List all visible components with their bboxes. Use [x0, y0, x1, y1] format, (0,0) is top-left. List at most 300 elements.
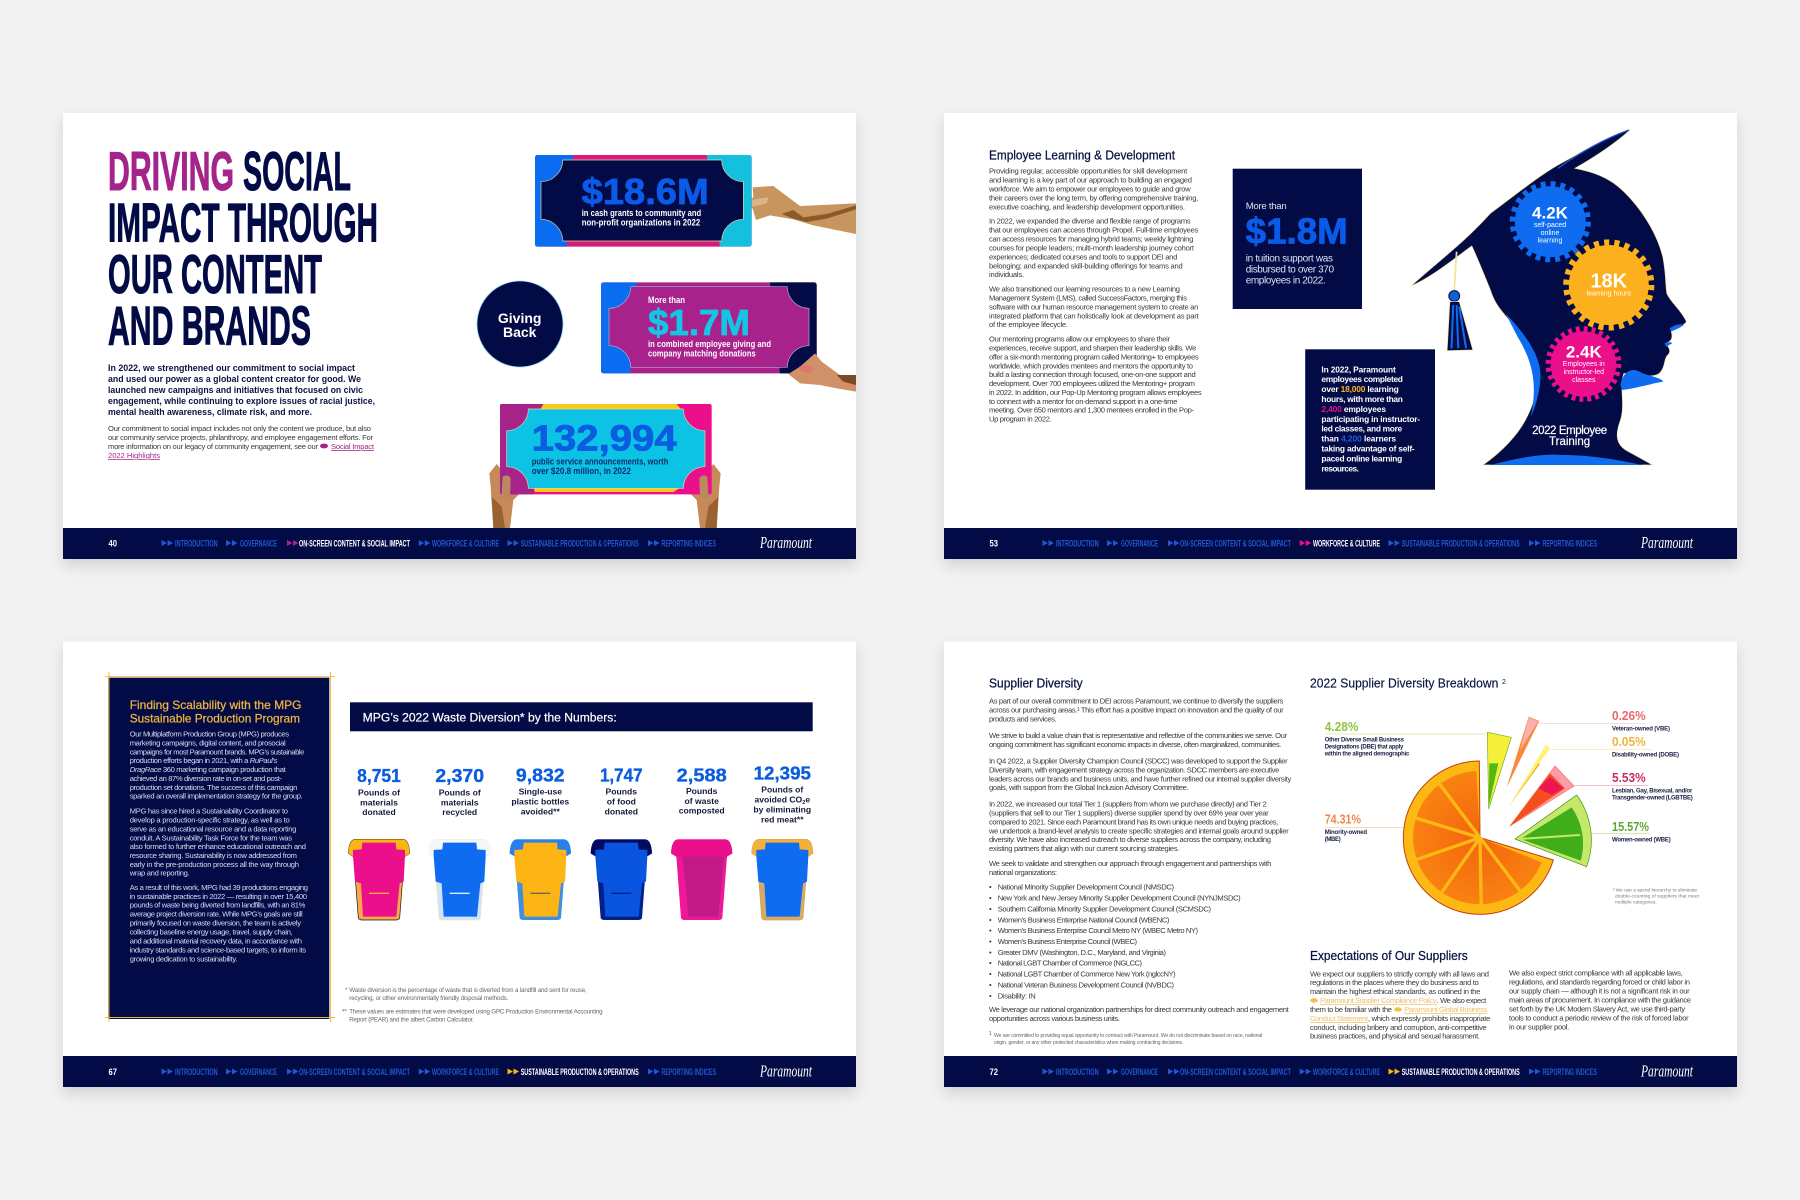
text column: expectations left: . We also expect [1437, 996, 1487, 1005]
body text: supplier diversity [988, 697, 1292, 877]
list: partner organizations: Disability: IN [998, 992, 1036, 1001]
gear: self-paced learning: online [1541, 230, 1559, 237]
hands holding third sign [489, 464, 721, 528]
gear: self-paced learning: 4.2K [1532, 203, 1569, 222]
panel body text: marketing campaigns, digital content, and prosocial [130, 738, 286, 747]
stat: waste composted: Pounds [686, 786, 718, 796]
stat: waste composted [677, 764, 727, 816]
sign: $1.7M: company matching donations [648, 348, 756, 358]
footnotes: waste diversion: ** [342, 1008, 347, 1015]
stat: materials donated: donated [362, 807, 396, 817]
gear: instructor-led classes: classes [1572, 377, 1596, 384]
heading: employee learning: Employee Learning & Development [989, 148, 1175, 162]
footer navigation: page 53: WORKFORCE & CULTURE [1313, 538, 1380, 548]
body text: supplier diversity: leaders across our brands and business units, and have further refined our internal supplier diversity [989, 774, 1292, 783]
list: partner organizations: Southern California Minority Supplier Development Council (SCMSDC) [998, 904, 1211, 913]
stat: materials donated: 8,751 [357, 765, 401, 786]
label: other diverse: Other Diverse Small Business [1325, 738, 1405, 744]
body text: supplier diversity: In 2022, we increased our total Tier 1 (suppliers from whom we purchase directly) and Tier 2 [989, 799, 1267, 808]
secondary paragraph with link [108, 424, 375, 460]
text column: expectations right: main areas of procurement. In compliance with the guidance [1509, 996, 1691, 1005]
stat: avoided CO2e: 2 [802, 800, 805, 806]
footer navigation: page 53: Paramount [1640, 533, 1694, 552]
body text: supplier diversity: diversity. We have also increased outreach to diverse suppliers across the company, including [989, 835, 1271, 844]
callout: training summary: resources. [1321, 463, 1359, 473]
panel heading [130, 698, 301, 725]
closing paragraph and footnote: We are committed to providing equal opportunity to contract with Paramount. We do not discriminate based on race, national [994, 1033, 1262, 1039]
label: veteran-owned: 0.26% [1612, 709, 1646, 723]
page 67: sustainable production [63, 642, 856, 1087]
closing paragraph and footnote: 1 [989, 1031, 992, 1037]
label: LGBTBE: 5.53% [1612, 771, 1646, 785]
text column: expectations right: in our supplier pool. [1509, 1023, 1569, 1032]
text column: expectations left: Paramount Global Business [1404, 1005, 1488, 1014]
secondary paragraph with link: Social Impact [331, 442, 375, 451]
text column: expectations left: We expect our suppliers to strictly comply with all laws and [1310, 969, 1489, 978]
sign: 132,994: over $20.8 million, in 2022 [532, 466, 631, 476]
stat: avoided CO2e: Pounds of [761, 785, 803, 795]
gear: instructor-led classes: Employees in [1563, 361, 1605, 368]
footer navigation: page 53: GOVERNANCE [1121, 538, 1158, 548]
footer navigation: page 53: 53 [990, 538, 998, 548]
gear: instructor-led classes: instructor-led [1564, 369, 1604, 376]
closing paragraph and footnote: origin, gender, or any other protected characteristics when making contracting decisions. [994, 1040, 1183, 1046]
body text: employee learning: belonging; and expanded skill-building offerings for teams and [989, 261, 1183, 270]
gear: self-paced learning: self-paced [1534, 222, 1566, 229]
footnotes: waste diversion: recycling, or other environmentally friendly disposal methods. [349, 995, 509, 1002]
closing paragraph and footnote [989, 1005, 1290, 1046]
body text: employee learning: experiences; dedicated courses and tools to support DEI and [989, 252, 1177, 261]
stat: avoided CO2e: by eliminating [753, 805, 811, 815]
body text: employee learning: to connect with a mentor for on-demand support in a one-time [989, 397, 1177, 406]
stat: materials recycled: recycled [442, 807, 477, 817]
list: partner organizations [989, 882, 1241, 1001]
footnotes: waste diversion: * [345, 987, 348, 994]
slice: veteran-owned [1507, 717, 1539, 787]
footer navigation: page 40 [63, 528, 856, 559]
banner: waste diversion heading: MPG’s 2022 Waste Diversion* by the Numbers: [363, 713, 617, 725]
text column: expectations right: regulations, and standards regarding forced or child labor in [1509, 978, 1690, 987]
title: DRIVING [108, 140, 234, 202]
list: partner organizations: • [989, 970, 992, 979]
stat: materials donated [357, 765, 401, 817]
label: women-owned: 15.57% [1612, 820, 1649, 834]
panel body text: early in the pre-production process all the way through [130, 860, 299, 869]
stat: materials recycled: Pounds of [439, 787, 481, 797]
stat: materials recycled: 2,370 [435, 765, 484, 786]
body text: employee learning: workforce. We aim to empower our employees to guide and grow [988, 184, 1191, 193]
list: partner organizations: Women’s Business Enterprise Council Metro NY (WBEC Metro NY) [998, 926, 1198, 935]
panel body text: pounds of waste being diverted from landfills, with an 81% [130, 901, 306, 910]
list: partner organizations: • [989, 959, 992, 968]
footer navigation: page 72: SUSTAINABLE PRODUCTION & OPERATIONS [1402, 1067, 1520, 1077]
gear: learning hours: learning hours [1587, 291, 1631, 298]
chart footnote: multiple categories. [1615, 900, 1657, 906]
footer navigation: page 67 [63, 1056, 856, 1087]
body text: employee learning [988, 166, 1202, 424]
footer navigation: page 67: REPORTING INDICES [662, 1067, 716, 1077]
callout: training summary: over 18,000 learning [1321, 384, 1399, 394]
label: women-owned [1612, 820, 1671, 844]
footnotes: waste diversion: Report (PEAR) and the albert Carbon Calculator. [349, 1016, 474, 1023]
text column: expectations right: set forth by the UK Modern Slavery Act, we use third-party [1509, 1005, 1685, 1014]
panel body text: primarily focused on waste diversion, the team is actively [130, 919, 301, 928]
page 40: driving social impact [63, 113, 856, 559]
body text: employee learning: in 2022. In addition, our Pop-Up Mentoring program allows employees [989, 388, 1202, 397]
panel body text: resource sharing. Sustainability is now addressed from [130, 851, 297, 860]
text column: expectations left: them to be familiar with the [1310, 1005, 1392, 1014]
footer navigation: page 40: SUSTAINABLE PRODUCTION & OPERATIONS [521, 538, 639, 548]
stat: avoided CO2e: e [805, 795, 810, 805]
list: partner organizations: National LGBT Chamber of Commerce (NGLCC) [998, 959, 1142, 968]
body text: employee learning: software with our human resource management system to create an [989, 302, 1198, 311]
text column: expectations left: , which expressly prohibits inappropriate [1368, 1014, 1490, 1023]
footer navigation: page 40: WORKFORCE & CULTURE [432, 538, 499, 548]
label: disability-owned: 0.05% [1612, 735, 1646, 749]
label: veteran-owned: Veteran-owned (VBE) [1612, 726, 1670, 732]
list: partner organizations: National Minority Supplier Development Council (NMSDC) [998, 882, 1174, 891]
body text: employee learning: can access resources for managing hybrid teams; weekly lightning [989, 234, 1193, 243]
body text: employee learning: Our mentoring programs allow our employees to share their [989, 334, 1170, 343]
panel body text: campaigns for most Paramount brands. MPG’s sustainable [130, 747, 304, 756]
footer navigation: page 40: 40 [108, 538, 117, 548]
intro paragraph: launched new campaigns and initiatives that focused on civic [108, 385, 364, 396]
sign: 132,994: public service announcements, worth [532, 457, 668, 467]
panel body text: growing dedication to sustainability. [130, 954, 237, 963]
stat: food donated: 1,747 [600, 765, 643, 786]
body text: employee learning: executive coaching, and leadership development opportunities. [989, 202, 1185, 211]
footer navigation: page 40: REPORTING INDICES [662, 538, 716, 548]
footer navigation: page 67: Paramount [759, 1062, 813, 1080]
label: other diverse [1324, 720, 1410, 758]
body text: supplier diversity: We seek to validate and strengthen our approach through engagement and partnerships with [989, 859, 1271, 868]
stat: materials donated: Pounds of [358, 787, 400, 797]
body text: employee learning: meeting. Over 650 mentors and 1,300 mentees enrolled in the Pop- [989, 406, 1194, 415]
slice: other DBE [1487, 732, 1511, 809]
callout: $1.8M tuition: $1.8M [1246, 210, 1348, 251]
panel body text: collecting baseline energy usage, travel, supply chain, [130, 928, 293, 937]
label: minority-owned: 74.31% [1325, 813, 1361, 827]
callout: training summary [1305, 349, 1435, 490]
gear: self-paced learning: learning [1538, 238, 1563, 245]
callout: training summary: paced online learning [1321, 453, 1402, 463]
body text: employee learning: integrated platform that can holistically look at development as part [989, 311, 1200, 320]
hand holding second sign [788, 353, 856, 392]
secondary paragraph with link: 2022 Highlights [108, 451, 160, 460]
panel heading: Finding Scalability with the MPG [130, 698, 301, 712]
label: LGBTBE: Lesbian, Gay, Bisexual, and/or [1612, 789, 1693, 795]
body text: employee learning: We also transitioned our learning resources to a new Learning [989, 284, 1180, 293]
body text: supplier diversity: products and services. [989, 715, 1057, 724]
callout: training summary: hours, with more than [1321, 394, 1403, 404]
intro paragraph: mental health awareness, climate risk, and more. [108, 407, 312, 418]
sign: $1.7M: $1.7M [648, 302, 750, 343]
slice: minority-owned [1403, 761, 1553, 914]
closing paragraph and footnote: opportunities across various business units. [989, 1014, 1120, 1023]
intro paragraph [108, 363, 375, 418]
stat: plastic bottles avoided: Single-use [519, 787, 562, 797]
label: other diverse: 4.28% [1325, 720, 1358, 734]
stat: plastic bottles avoided: 9,832 [516, 764, 565, 785]
footer navigation: page 67: ON-SCREEN CONTENT & SOCIAL IMPACT [299, 1067, 410, 1077]
label: disability-owned: Disability-owned (DOBE) [1612, 753, 1679, 759]
stat: plastic bottles avoided [511, 764, 569, 816]
body text: employee learning: individuals. [989, 270, 1024, 279]
panel body text: As a result of this work, MPG had 39 productions engaging [130, 883, 308, 892]
callout: training summary: employees completed [1321, 374, 1403, 384]
footer navigation: page 67: SUSTAINABLE PRODUCTION & OPERATIONS [521, 1067, 639, 1077]
title: AND BRANDS [108, 294, 311, 356]
footnotes: waste diversion: Waste diversion is the percentage of waste that is diverted from a landfill and sent for reuse, [349, 987, 587, 994]
chart: citrus pie [1325, 717, 1652, 914]
gear: self-paced learning [1512, 184, 1588, 260]
body text: supplier diversity: (suppliers that sell to our Tier 1 suppliers) diverse supplier spend by over 69% year over year [989, 808, 1269, 817]
footer navigation: page 67: 67 [108, 1067, 117, 1077]
hand holding first sign [745, 186, 856, 234]
callout: $1.8M tuition: in tuition support was [1246, 254, 1333, 265]
callout: training summary: taking advantage of self- [1321, 444, 1415, 454]
stat: waste composted: composted [679, 806, 725, 816]
page 72: supplier diversity [944, 642, 1737, 1087]
footer navigation: page 72: INTRODUCTION [1056, 1067, 1099, 1077]
giving back badge: Giving [498, 310, 541, 326]
body text: employee learning: development. Over 700 employees utilized the Mentoring+ program [989, 379, 1195, 388]
body text: supplier diversity: we undertook a brand-level analysis to create specific strategies and internal goals around supplier [988, 826, 1289, 835]
panel body text: also formed to further enhance educational outreach and [130, 842, 306, 851]
footer navigation: page 67: WORKFORCE & CULTURE [432, 1067, 499, 1077]
panel body text: production efforts began in 2021, with a RuPaul’s [130, 756, 278, 765]
list: partner organizations: National Veteran Business Development Council (NVBDC) [998, 981, 1174, 990]
label: minority-owned [1325, 813, 1367, 843]
list: partner organizations: Greater DMV (Washington, D.C., Maryland, and Virginia) [998, 948, 1166, 957]
footer navigation: page 40: GOVERNANCE [240, 538, 277, 548]
panel body text [129, 729, 308, 963]
body text: employee learning: and learning is a key part of our approach to building an engaged [989, 175, 1192, 184]
text column: expectations right [1509, 969, 1691, 1032]
body text: employee learning: their careers over the long term, by offering comprehensive training, [989, 193, 1198, 202]
callout: $1.8M tuition: employees in 2022. [1246, 275, 1326, 286]
intro paragraph: and used our power as a global content creator for good. We [108, 374, 361, 385]
title: SOCIAL [243, 140, 351, 202]
label: veteran-owned [1612, 709, 1670, 732]
list: partner organizations: • [989, 926, 992, 935]
closing paragraph and footnote: We leverage our national organization partnerships for direct community outreach and engagement [989, 1005, 1290, 1014]
footer navigation: page 72: GOVERNANCE [1121, 1067, 1158, 1077]
heading: supplier diversity breakdown: 2022 Supplier Diversity Breakdown [1310, 677, 1498, 691]
banner: waste diversion heading [350, 702, 813, 731]
label: LGBTBE [1612, 771, 1693, 802]
heading: supplier diversity: Supplier Diversity [989, 677, 1083, 691]
text column: expectations left: conduct, including bribery and corruption, anti-competitive [1310, 1023, 1487, 1032]
sign: $18.6M: in cash grants to community and [582, 208, 701, 218]
body text: supplier diversity: Diversity team, with engagement strategy across the organization. SDCC members are executive [989, 765, 1279, 774]
body text: supplier diversity: goals, with support from the Global Inclusion Advisory Committee. [989, 783, 1189, 792]
label: women-owned: Women-owned (WBE) [1612, 838, 1671, 844]
stat: plastic bottles avoided: plastic bottles [511, 797, 569, 807]
body text: employee learning: experiences, receive support, and sharpen their leadership skills. We [989, 343, 1196, 352]
footer navigation: page 53: ON-SCREEN CONTENT & SOCIAL IMPACT [1180, 538, 1291, 548]
panel body text: and additional material recovery data, in accordance with [130, 936, 302, 945]
stat: materials recycled: materials [441, 797, 479, 807]
body text: employee learning: offer a six-month mentoring program called Mentoring+ to employees [989, 352, 1199, 361]
slice: LGBTBE [1510, 766, 1574, 826]
footer navigation: page 53: INTRODUCTION [1056, 538, 1099, 548]
body text: employee learning: that our employees can access through Propel. Full-time employees [989, 225, 1199, 234]
label: disability-owned [1612, 735, 1679, 759]
icon: magenta waste bin [671, 839, 732, 920]
panel body text: MPG has since hired a Sustainability Coordinator to [130, 806, 288, 815]
footer navigation: page 67: INTRODUCTION [175, 1067, 218, 1077]
footer navigation: page 40: Paramount [759, 533, 813, 552]
body text: employee learning: In 2022, we expanded the diverse and flexible range of programs [989, 216, 1191, 225]
list: partner organizations: Women’s Business Enterprise National Council (WBENC) [998, 915, 1170, 924]
list: partner organizations: • [989, 981, 992, 990]
text column: expectations left: Conduct Statement [1310, 1014, 1369, 1023]
list: partner organizations: New York and New Jersey Minority Supplier Development Council (NYNJMSDC) [998, 893, 1241, 902]
title: IMPACT THROUGH [108, 192, 378, 254]
intro paragraph: engagement, while continuing to explore issues of racial justice, [108, 396, 375, 407]
footer navigation: page 72: Paramount [1640, 1062, 1694, 1080]
callout: $1.8M tuition: disbursed to over 370 [1246, 265, 1334, 276]
body text: supplier diversity: In Q4 2022, a Supplier Diversity Champion Council (SDCC) was developed to support the Supplier [989, 756, 1288, 765]
footer navigation: page 53: SUSTAINABLE PRODUCTION & OPERATIONS [1402, 538, 1520, 548]
chart footnote: ² We use a spend hierarchy to eliminate [1613, 888, 1697, 894]
callout: $1.8M tuition: More than [1246, 201, 1287, 212]
panel: MPG sustainable production program [105, 672, 335, 1022]
gear: learning hours [1566, 242, 1651, 328]
label: other diverse: Designations (DBE) that apply [1325, 745, 1404, 751]
panel body text: DragRace 360 marketing campaign production that [130, 765, 287, 774]
sign: $1.7M [601, 282, 817, 373]
sign: $18.6M: non-profit organizations in 2022 [582, 218, 700, 228]
sign: $1.7M: More than [648, 295, 685, 305]
panel body text: Our Multiplatform Production Group (MPG) produces [130, 729, 289, 738]
callout: $1.8M tuition [1233, 169, 1362, 309]
body text: supplier diversity: existing partners that align with our current sourcing strategies. [989, 844, 1179, 853]
secondary paragraph with link: Our commitment to social impact includes not only the content we produce, but also [108, 424, 371, 433]
footer navigation: page 72 [944, 1056, 1737, 1087]
stat: food donated: Pounds [606, 787, 637, 797]
icon: blue and gold waste bin [752, 839, 813, 920]
slice: women-owned [1515, 795, 1591, 867]
label: minority-owned: (MBE) [1325, 837, 1341, 843]
title [108, 140, 378, 356]
callout: training summary: than 4,200 learners [1321, 434, 1396, 444]
body text: employee learning: build a lasting connection through focused, one-on-one support and [989, 370, 1196, 379]
list: partner organizations: • [989, 915, 992, 924]
stat: food donated: of food [607, 797, 636, 807]
list: partner organizations: Women’s Business Enterprise Council (WBEC) [998, 937, 1137, 946]
page 53: employee learning [944, 113, 1737, 559]
secondary paragraph with link: more information on our legacy of community engagement, see our [108, 442, 318, 451]
secondary paragraph with link: our community service projects, philanthropy, and employee engagement efforts. For [108, 433, 373, 442]
body text: supplier diversity: national organizations: [989, 868, 1057, 877]
list: partner organizations: • [989, 904, 992, 913]
icon: dark blue waste bin [591, 839, 652, 920]
body text: supplier diversity: ongoing commitment has significant economic impacts in diverse, often marginalized, communities. [989, 740, 1281, 749]
sign: $1.7M: in combined employee giving and [648, 339, 771, 349]
icon: pink waste bin [348, 839, 410, 920]
footnotes: waste diversion: These values are estimates that were developed using GPC Production Environmental Accounting [349, 1008, 603, 1015]
body text: employee learning: of the employee lifecycle. [989, 320, 1068, 329]
text column: expectations left: Paramount Supplier Compliance Policy [1320, 996, 1437, 1005]
stat: avoided CO2e: red meat** [761, 814, 804, 824]
footer navigation: page 53 [944, 528, 1737, 559]
list: partner organizations: • [989, 992, 992, 1001]
footer navigation: page 72: ON-SCREEN CONTENT & SOCIAL IMPACT [1180, 1067, 1291, 1077]
callout: training summary: 2,400 employees [1321, 404, 1386, 414]
panel body text: production set donations. The success of this campaign [130, 783, 297, 792]
footer navigation: page 72: WORKFORCE & CULTURE [1313, 1067, 1380, 1077]
footnotes: waste diversion [342, 987, 603, 1023]
slice: disability-owned [1508, 744, 1550, 807]
body text: employee learning: worldwide, which provides mentees and mentors the opportunity to [988, 361, 1193, 370]
panel body text: wrap and reporting. [129, 869, 190, 878]
stat: food donated [600, 765, 643, 816]
text column: expectations right: We also expect strict compliance with all applicable laws, [1509, 969, 1683, 978]
panel body text: average project diversion rate. While MPG’s goals are still [130, 910, 303, 919]
gear: instructor-led classes [1548, 329, 1619, 399]
giving back badge: Back [503, 324, 537, 340]
body text: supplier diversity: across our purchasing areas.¹ This effort has a positive impact on innovation and the quality of our [989, 706, 1284, 715]
panel body text: achieved an 87% diversion rate in on-set and post- [130, 774, 282, 783]
text column: expectations left: business practices, and physical and sexual harassment. [1310, 1032, 1480, 1041]
list: partner organizations: • [989, 882, 992, 891]
body text: supplier diversity: We strive to build a value chain that is representative and reflective of the communities we serve. Our [989, 731, 1287, 740]
callout: training summary: participating in instructor- [1321, 414, 1420, 424]
text column: expectations right: tools to conduct a periodic review of the risk of forced labor [1509, 1014, 1689, 1023]
footer navigation: page 40: ON-SCREEN CONTENT & SOCIAL IMPACT [299, 538, 410, 548]
silhouette label [1532, 425, 1607, 448]
footer navigation: page 40: INTRODUCTION [175, 538, 218, 548]
callout: training summary: led classes, and more [1321, 424, 1403, 434]
panel body text: develop a production-specific strategy, as well as to [130, 815, 290, 824]
panel body text: in sustainable practices in 2022 — resulting in over 15,400 [130, 892, 307, 901]
sign: $18.6M [535, 155, 752, 247]
list: partner organizations: • [989, 948, 992, 957]
giving back badge [477, 281, 563, 367]
footer navigation: page 67: GOVERNANCE [240, 1067, 277, 1077]
panel heading: Sustainable Production Program [130, 711, 300, 725]
stat: materials recycled [435, 765, 484, 817]
stat: materials donated: materials [360, 797, 398, 807]
footer navigation: page 53: REPORTING INDICES [1542, 538, 1597, 548]
text column: expectations left: regulations in the places where they do business and to [1310, 978, 1479, 987]
panel body text: industry standards and science-based targets, to inform its [130, 945, 306, 954]
body text: employee learning: Providing regular, accessible opportunities for skill development [989, 166, 1188, 175]
intro paragraph: In 2022, we strengthened our commitment to social impact [108, 363, 356, 374]
stat: avoided CO2e: 12,395 [754, 763, 811, 784]
stat: avoided CO2e [753, 763, 811, 824]
stat: waste composted: of waste [685, 796, 719, 806]
heading: expectations of our suppliers: Expectations of Our Suppliers [1310, 949, 1468, 963]
text column: expectations left: maintain the highest ethical standards, as outlined in the [1310, 987, 1480, 996]
stat: plastic bottles avoided: avoided** [521, 806, 561, 816]
silhouette label: Training [1549, 436, 1590, 448]
icon: blue waste bin [429, 839, 490, 920]
panel body text: conduit. A Sustainability Task Force for the team was [130, 833, 292, 842]
gear: instructor-led classes: 2.4K [1566, 343, 1602, 362]
gear: learning hours: 18K [1590, 271, 1628, 293]
label: other diverse: within the aligned demographic [1324, 752, 1410, 758]
stat: food donated: donated [605, 806, 638, 816]
stat: avoided CO2e: avoided CO [754, 795, 802, 805]
title: OUR CONTENT [108, 243, 322, 305]
heading: supplier diversity breakdown: 2 [1502, 679, 1506, 686]
panel body text: sparked an overall implementation strategy for the group. [130, 792, 303, 801]
text column: expectations left [1310, 969, 1490, 1041]
body text: supplier diversity: As part of our overall commitment to DEI across Paramount, we continue to diversify the suppliers [989, 697, 1284, 706]
